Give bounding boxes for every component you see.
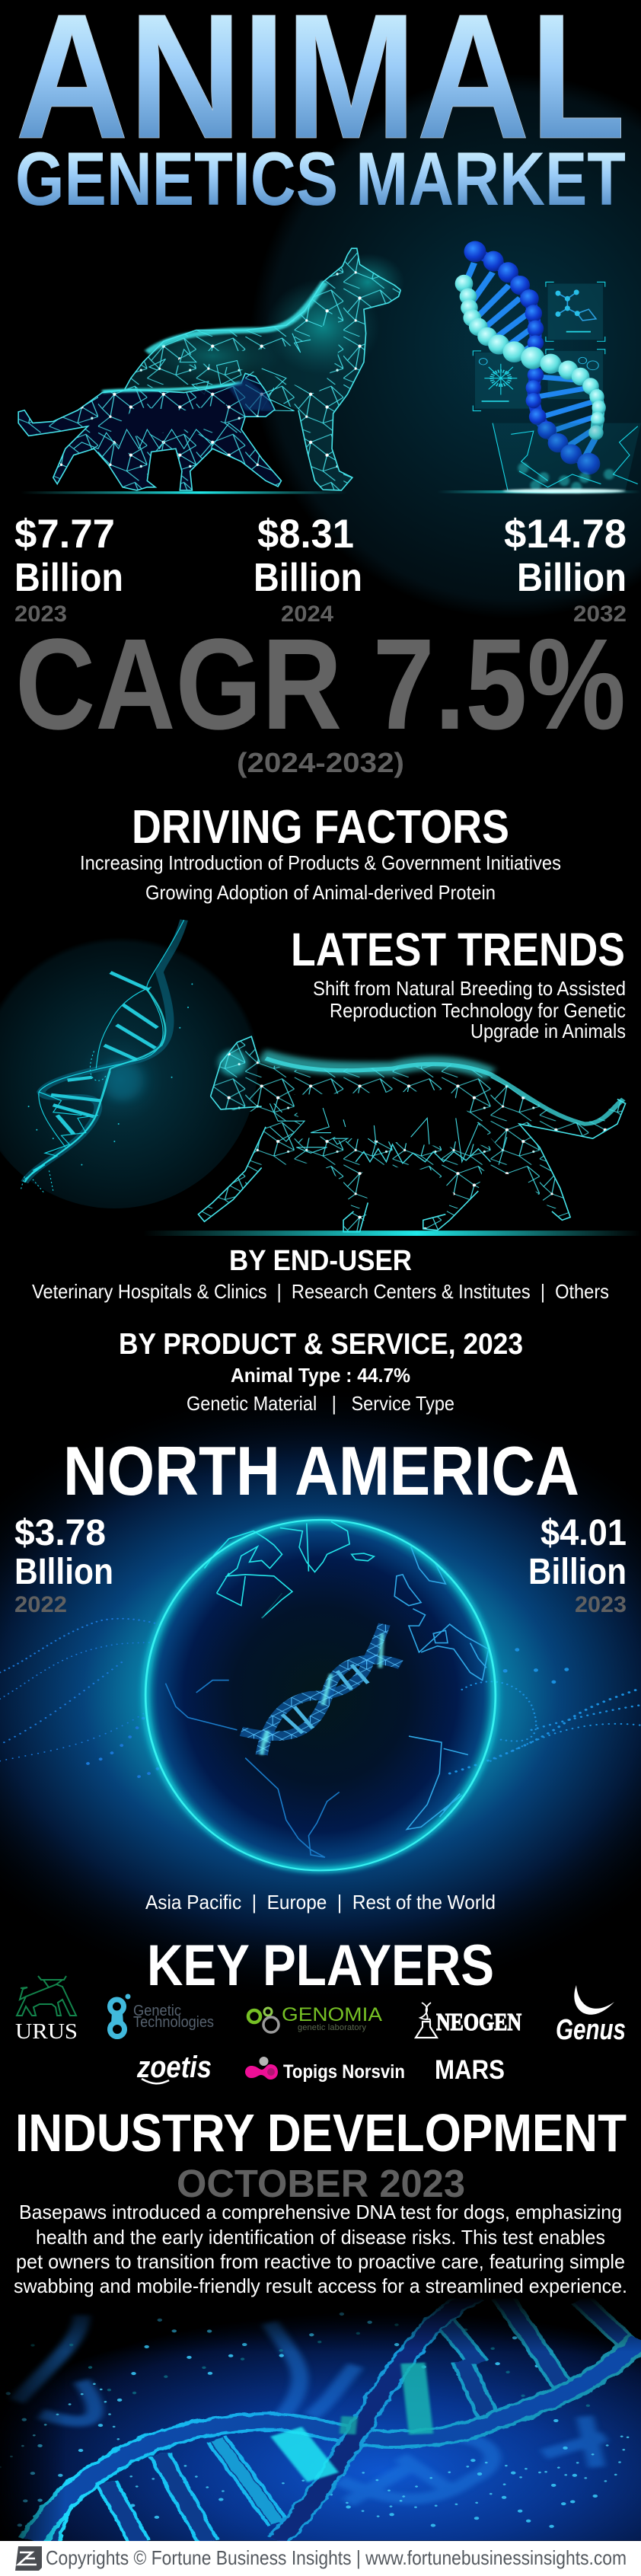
stat: 2024 market size: $8.31 xyxy=(257,512,354,557)
ground line: animals xyxy=(21,491,347,494)
panel: by product and service: BY PRODUCT & SERVICE, 2023 xyxy=(119,1328,523,1361)
stat: 2024 market size: Billion xyxy=(254,556,362,600)
panel: hero illustration xyxy=(18,74,641,618)
stat: 2024 market size: 2024 xyxy=(281,602,333,627)
regions list: Asia Pacific | Europe | Rest of the World xyxy=(145,1891,496,1914)
icon: hologram base xyxy=(438,423,641,493)
stat: 2023 regional size: $4.01 xyxy=(541,1513,627,1553)
left fade xyxy=(0,2296,65,2541)
panel: driving factors: Increasing Introduction of Products & Government Initiatives xyxy=(80,851,561,874)
side fades xyxy=(0,2296,641,2351)
stat: 2022 regional size: BIllion xyxy=(14,1552,113,1592)
particles: left wave xyxy=(0,1619,192,1776)
panel: by end-user xyxy=(32,1245,609,1303)
panel: by product and service: Genetic Material | Service Type xyxy=(187,1392,454,1415)
icon: hologram panels xyxy=(473,282,605,411)
logo: Genetic Technologies: Genetic xyxy=(133,2003,181,2019)
illustration: DNA strand background xyxy=(0,2269,641,2542)
logo: Genomia: genetic laboratory xyxy=(298,2023,367,2032)
stat: 2023 regional size: 2023 xyxy=(575,1592,627,1617)
icon: dog wireframe xyxy=(125,248,405,490)
icon: DNA helix of spheres xyxy=(455,241,606,474)
stat: 2023 regional size: Billion xyxy=(528,1552,627,1592)
panel: driving factors xyxy=(80,801,561,904)
particles: right wave xyxy=(450,1650,641,1773)
stat: 2022 regional size: $3.78 xyxy=(14,1513,106,1553)
panel: by product and service: Animal Type : 44.7% xyxy=(231,1364,410,1387)
stat: 2032 market size xyxy=(504,512,627,627)
blurred ghost DNA xyxy=(16,2315,605,2503)
stat: 2032 market size: Billion xyxy=(517,556,627,600)
logo: URUS: URUS xyxy=(15,2020,78,2044)
panel: by end-user: BY END-USER xyxy=(229,1245,412,1277)
logo: Neogen: NEOGEN xyxy=(436,2008,521,2035)
icon: cat wireframe, large xyxy=(198,1036,626,1232)
stat: 2023 market size: Billion xyxy=(14,556,123,600)
stat: 2023 regional size xyxy=(528,1513,627,1617)
panel: industry development: swabbing and mobile-friendly result access for a streamlined experience. xyxy=(14,2274,627,2297)
icon: DNA inside globe xyxy=(241,1624,400,1755)
panel: footer xyxy=(0,2541,641,2576)
continents xyxy=(165,1521,489,1857)
panel: north america globe xyxy=(0,1384,641,2006)
stat: 2024 market size xyxy=(254,512,362,627)
stat: 2022 regional size: 2022 xyxy=(14,1592,67,1617)
logo: zoetis: zoetis xyxy=(136,2051,212,2084)
logo: Genomia: GENOMIA xyxy=(282,2004,382,2025)
panel: driving factors: Growing Adoption of Animal-derived Protein xyxy=(145,881,496,904)
background glow: left circle xyxy=(0,923,257,1208)
ground line: cat xyxy=(143,1231,641,1236)
mask above strand xyxy=(0,2269,641,2298)
logo: Topigs Norsvin xyxy=(245,2057,405,2083)
panel: industry development: OCTOBER 2023 xyxy=(177,2162,465,2205)
panel: latest trends illustration xyxy=(0,920,641,1236)
particles xyxy=(0,2307,630,2536)
stat: 2032 market size: $14.78 xyxy=(504,512,627,557)
panel: industry development: health and the early identification of disease risks. This test enables xyxy=(36,2226,605,2249)
panel: latest trends: Upgrade in Animals xyxy=(470,1020,626,1042)
rungs: bright highlights xyxy=(286,2363,421,2477)
logo: Genetic Technologies: Technologies xyxy=(133,2014,214,2031)
stat: 2022 regional size xyxy=(14,1513,113,1617)
stat: 2032 market size: 2032 xyxy=(573,602,627,627)
stat: 2023 market size: 2023 xyxy=(14,602,67,627)
stat: 2023 market size: $7.77 xyxy=(14,512,115,557)
heading: north america: NORTH AMERICA xyxy=(63,1433,579,1510)
logo: URUS xyxy=(15,1976,78,2044)
main strand xyxy=(33,2294,641,2542)
CAGR callout: (2024-2032) xyxy=(237,747,404,778)
logo: Fortune Business Insights xyxy=(15,2546,42,2571)
panel: by product and service xyxy=(119,1328,523,1415)
background glow: globe xyxy=(0,1384,641,2006)
heading: key players: KEY PLAYERS xyxy=(147,1933,494,1998)
stat: 2023 market size xyxy=(14,512,123,627)
panel: driving factors: DRIVING FACTORS xyxy=(132,801,509,854)
panel: latest trends xyxy=(291,924,626,1042)
icon: cat wireframe, small xyxy=(18,373,281,490)
panel: industry development: pet owners to transition from reactive to proactive care, featuring simple xyxy=(16,2250,625,2273)
logo: Genetic Technologies xyxy=(110,1993,214,2036)
icon: wireframe DNA xyxy=(21,920,192,1194)
globe ring xyxy=(145,1520,496,1870)
globe disc xyxy=(145,1520,496,1870)
logo: Genomia xyxy=(248,2004,382,2032)
logo: Genus xyxy=(556,1985,626,2046)
background glow: top right xyxy=(250,74,641,618)
logo: MARS: MARS xyxy=(435,2055,505,2085)
logo: Topigs Norsvin: Topigs Norsvin xyxy=(283,2061,405,2083)
panel: industry development xyxy=(14,2103,627,2297)
panel: company logos xyxy=(15,1976,626,2085)
logo: Neogen xyxy=(416,2003,521,2038)
panel: industry development: Basepaws introduced a comprehensive DNA test for dogs, emphasizing xyxy=(19,2201,622,2223)
